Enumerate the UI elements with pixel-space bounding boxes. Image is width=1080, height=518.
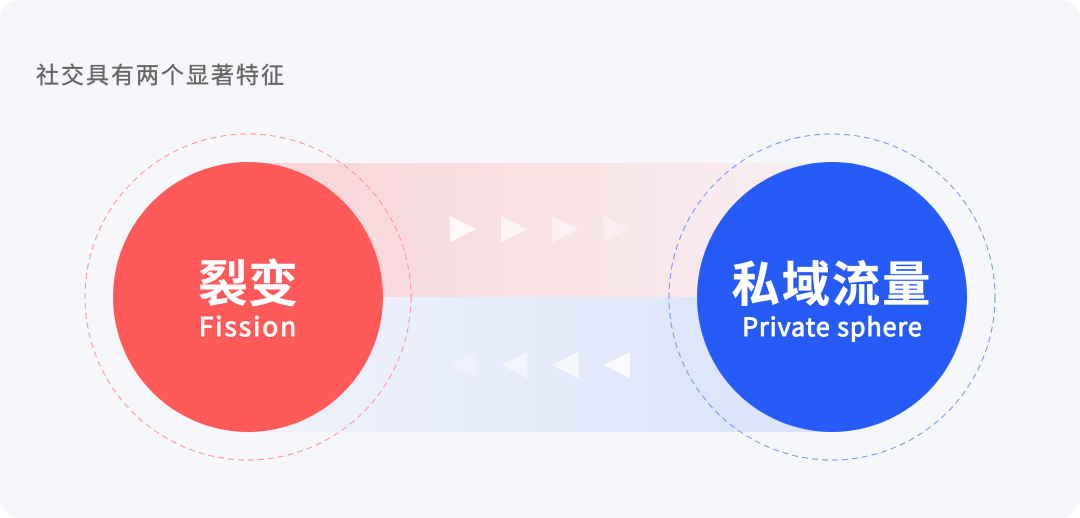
dashed ring: private sphere [669,134,995,460]
circle: fission [113,162,383,432]
arrows: pointing left [450,352,630,378]
circle: private sphere: 私域流量 [732,245,932,315]
dashed ring: fission [85,134,411,460]
band: private sphere to fission [248,297,832,432]
band: fission to private sphere [248,163,832,297]
circle: fission: Fission [199,307,298,344]
circle: private sphere [697,162,967,432]
arrows: pointing right [450,216,630,242]
circle: fission: 裂变 [198,244,298,316]
circle: private sphere: Private sphere [742,308,923,344]
title: 社交具有两个显著特征 [36,56,286,90]
